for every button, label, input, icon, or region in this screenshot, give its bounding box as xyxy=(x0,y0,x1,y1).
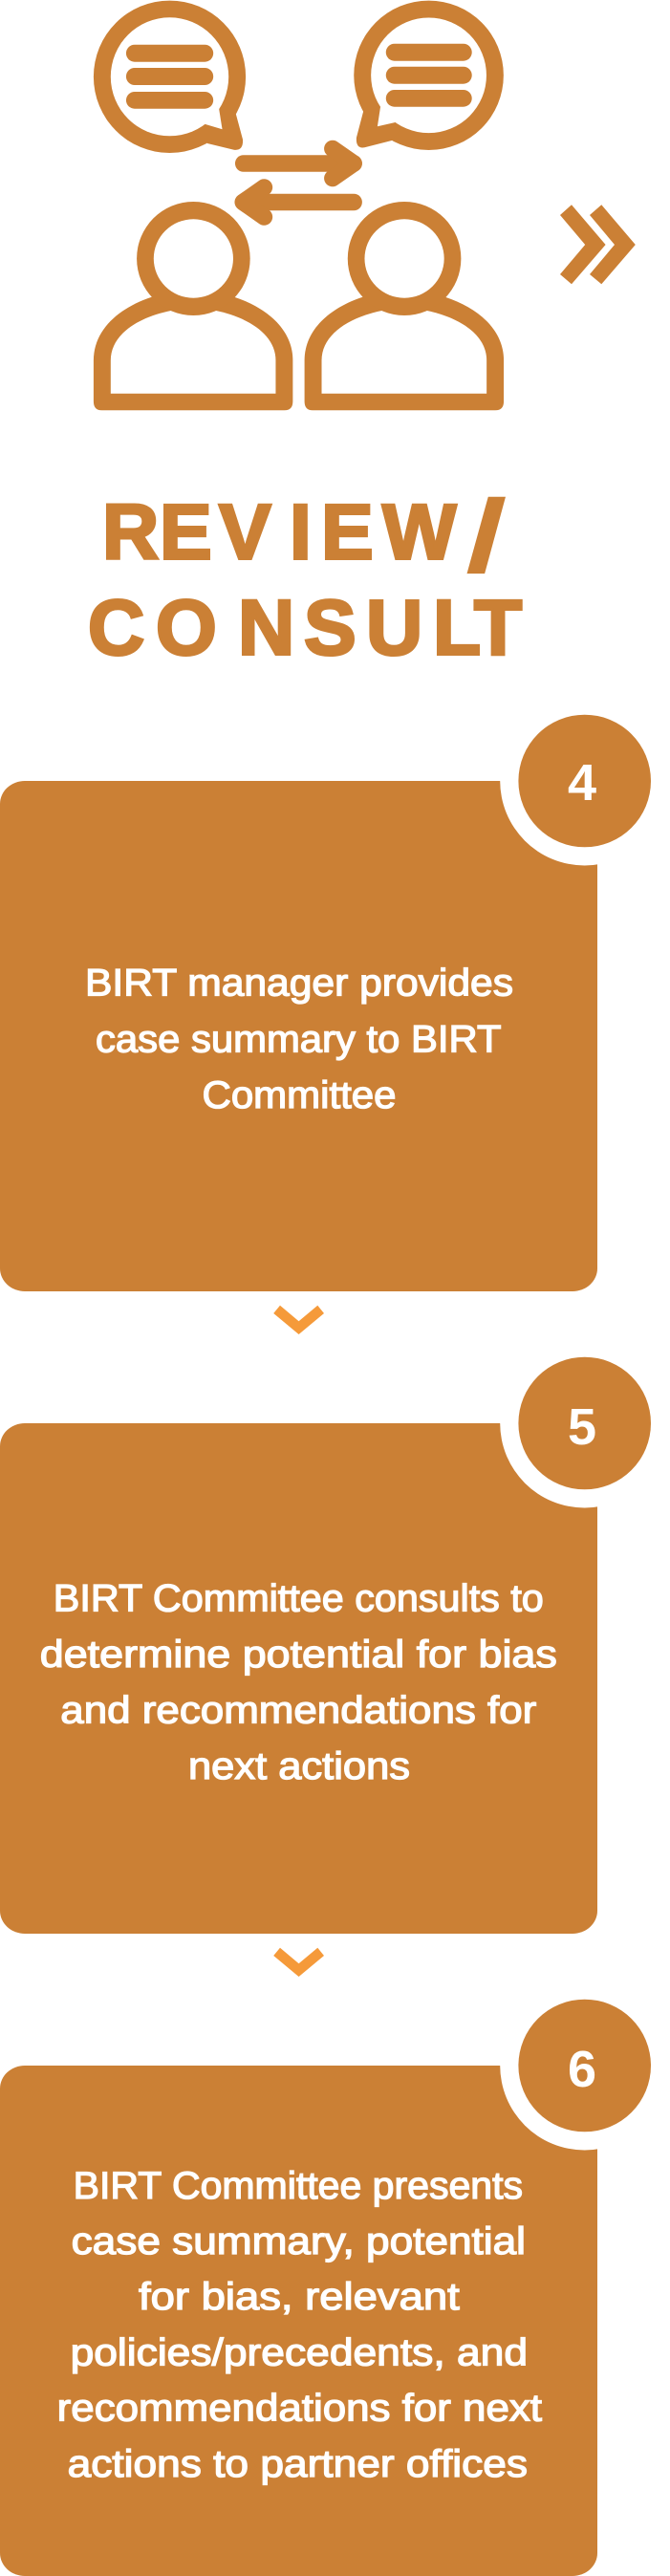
text: step 5 description: BIRT Committee consults to xyxy=(54,1577,544,1619)
title: REVIEW/ CONSULT: / xyxy=(465,478,508,594)
title: REVIEW/ CONSULT xyxy=(88,478,522,671)
text: step 4 description: Committee xyxy=(203,1074,396,1116)
text: step 6 description: for bias, relevant xyxy=(139,2276,460,2318)
panel: step 5 xyxy=(0,1338,669,1934)
text: step 6 description xyxy=(57,2165,542,2485)
arrow: pointing right xyxy=(244,149,354,178)
text: step 6 description: actions to partner offices xyxy=(68,2443,528,2485)
badge: number 4: 4 xyxy=(568,754,596,812)
icon: left person xyxy=(94,202,292,410)
panel: step 4 xyxy=(0,696,669,1291)
title: REVIEW/ CONSULT: REVIEW xyxy=(102,489,457,575)
text: step 6 description: case summary, potential xyxy=(72,2220,526,2262)
icon: two people exchanging speech bubbles xyxy=(94,1,504,410)
arrow: chevron down between steps 4 and 5 xyxy=(273,1306,324,1334)
icon: right person xyxy=(305,202,504,410)
arrow: chevron down between steps 5 and 6 xyxy=(273,1948,324,1977)
text: step 5 description xyxy=(40,1577,557,1787)
text: step 6 description: recommendations for next xyxy=(57,2388,542,2430)
text: step 5 description: next actions xyxy=(188,1745,410,1787)
icon: double chevron pointing right xyxy=(560,205,636,284)
text: step 6 description: policies/precedents, and xyxy=(71,2332,528,2374)
badge: number 6 xyxy=(518,2000,651,2132)
text: step 5 description: and recommendations for xyxy=(60,1690,536,1732)
icon: right speech bubble xyxy=(354,1,504,150)
icon: left speech bubble xyxy=(94,1,246,153)
text: step 5 description: determine potential for bias xyxy=(40,1634,557,1676)
text: step 6 description: BIRT Committee presents xyxy=(74,2165,523,2207)
text: step 4 description xyxy=(85,962,513,1116)
badge: number 6: 6 xyxy=(568,2041,596,2098)
text: step 4 description: BIRT manager provides xyxy=(85,962,513,1004)
title: REVIEW/ CONSULT: CONSULT xyxy=(88,585,522,671)
text: step 4 description: case summary to BIRT xyxy=(96,1019,501,1061)
arrow: pointing left xyxy=(243,187,354,217)
badge: number 5 xyxy=(518,1357,651,1489)
panel: step 6 xyxy=(0,1981,669,2576)
badge: number 4 xyxy=(518,715,651,847)
badge: number 5: 5 xyxy=(568,1398,596,1456)
